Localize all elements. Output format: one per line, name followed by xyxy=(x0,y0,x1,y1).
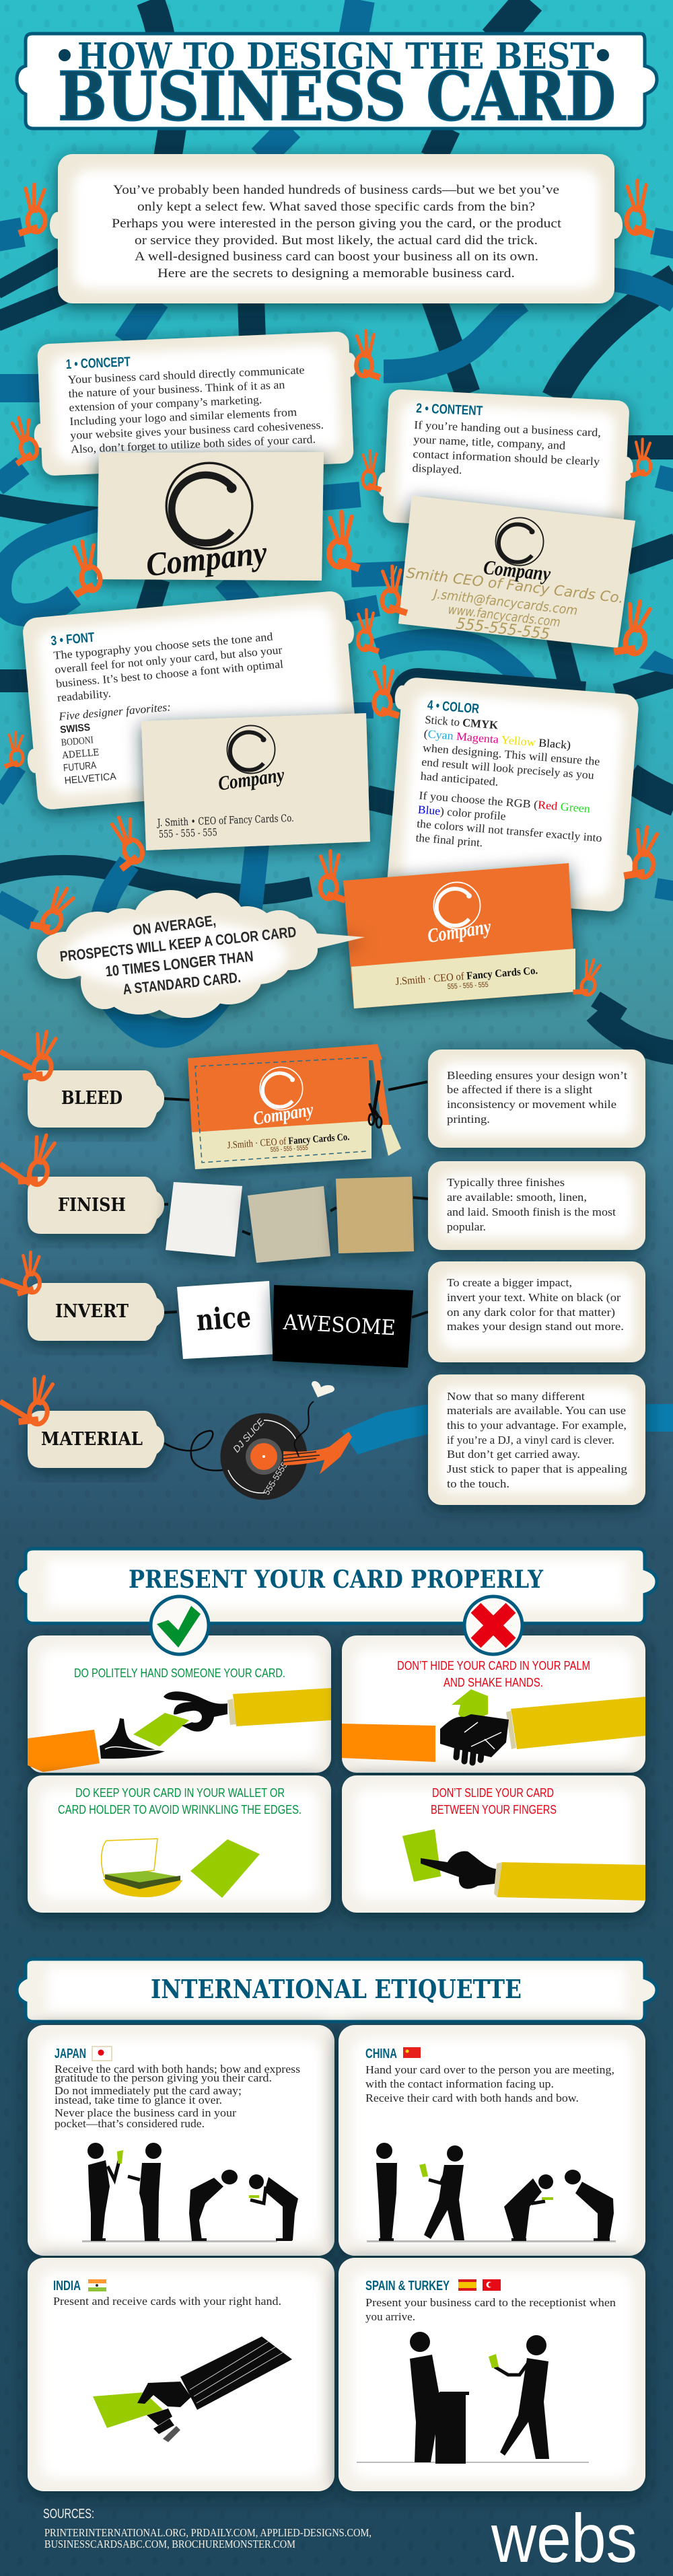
banner: international etiquette xyxy=(17,1959,657,2022)
callout: color card statistic: PROSPECTS WILL KEEP A COLOR CARD xyxy=(59,923,297,965)
text box: invert: invert your text. White on black (or xyxy=(447,1291,621,1304)
card: content details xyxy=(389,496,635,648)
panel: 4 color xyxy=(380,676,646,913)
text box: material: Now that so many different xyxy=(447,1390,585,1403)
title line one: HOW TO DESIGN THE BEST xyxy=(77,36,594,77)
panel: 1 concept xyxy=(30,331,361,476)
smooth swatch xyxy=(166,1182,242,1257)
icon: scissors xyxy=(369,1080,382,1128)
japan text: Do not immediately put the card away; xyxy=(55,2084,242,2097)
handwritten details: 555-555-555 xyxy=(455,615,551,643)
color text: If you choose the RGB ( Red Green xyxy=(419,789,591,815)
color text: the colors will not transfer exactly into xyxy=(417,817,602,844)
callout: color card statistic: 10 TIMES LONGER THAN xyxy=(104,947,254,980)
icon: orange hands holding panels xyxy=(5,181,658,997)
concept text: Also, don’t forget to utilize both sides of your card. xyxy=(71,433,316,455)
text box: bleed: be affected if there is a slight xyxy=(447,1083,592,1096)
china text: Hand your card over to the person you are meeting, xyxy=(365,2063,614,2076)
color text: the final print. xyxy=(415,832,483,849)
panel: do hand card xyxy=(28,1635,331,1773)
color text: end result will look precisely as you xyxy=(421,756,595,782)
sources: SOURCES: xyxy=(43,2507,94,2522)
text box: material: this to your advantage. For example, xyxy=(447,1419,627,1432)
concept text: Your business card should directly communicate xyxy=(67,363,305,386)
record xyxy=(221,1413,307,1500)
logo mark xyxy=(260,1067,303,1110)
title banner xyxy=(17,34,657,136)
title dot right xyxy=(597,49,609,61)
card phone: 555 - 555 - 5555 xyxy=(271,1144,308,1154)
panel: dont hide card xyxy=(342,1635,645,1773)
font text: BODONI xyxy=(61,735,94,748)
panel: do keep card: DO KEEP YOUR CARD IN YOUR WALLET OR xyxy=(75,1786,285,1800)
text box: bleed: inconsistency or movement while xyxy=(447,1098,616,1111)
logo mark xyxy=(166,463,252,549)
intro text: or service they provided. But most likely, the actual card did the trick. xyxy=(135,233,538,248)
panel: dont slide card: DON’T SLIDE YOUR CARD xyxy=(432,1786,554,1800)
font text: readability. xyxy=(57,687,112,704)
font text: business. It’s best to choose a font with optimal xyxy=(55,657,284,690)
callout: color card statistic: ON AVERAGE, xyxy=(132,912,217,939)
text box: bleed xyxy=(428,1050,645,1148)
tag: bleed: BLEED xyxy=(61,1088,122,1109)
banner: international etiquette: INTERNATIONAL ETIQUETTE xyxy=(151,1974,522,2004)
china text: Receive their card with both hands and bow. xyxy=(365,2092,579,2104)
card details: J.Smith · CEO of Fancy Cards Co. xyxy=(395,965,538,988)
panel: japan xyxy=(28,2025,334,2256)
illustration: handshake xyxy=(342,1689,645,1763)
font text: overall feel for not only your card, but also your xyxy=(55,643,283,676)
illustration: vinyl card xyxy=(164,1381,428,1500)
spain and turkey text xyxy=(365,2296,616,2323)
concept text: extension of your company’s marketing. xyxy=(69,393,262,414)
laid swatch xyxy=(336,1177,414,1253)
text box: material: But don’t get carried away. xyxy=(447,1448,580,1461)
handwritten details: J. Smith CEO of Fancy Cards Co. xyxy=(389,563,625,606)
company script: Company xyxy=(252,1099,315,1130)
china heading: CHINA xyxy=(365,2047,397,2061)
color text: had anticipated. xyxy=(420,770,499,788)
sources xyxy=(43,2507,371,2550)
icon: tag hands xyxy=(0,1029,57,1427)
banner: present your card properly: PRESENT YOUR CARD PROPERLY xyxy=(129,1566,544,1594)
concept text: the nature of your business. Think of it as an xyxy=(68,378,285,400)
connecting strings xyxy=(164,1082,428,1317)
tag: material xyxy=(28,1411,164,1468)
india text: Present and receive cards with your right hand. xyxy=(53,2295,281,2308)
content text: contact information should be clearly xyxy=(413,447,600,468)
intro text: only kept a select few. What saved those specific cards from the bin? xyxy=(137,200,535,214)
logo: webs: webs xyxy=(491,2500,637,2576)
panel: dont slide card: BETWEEN YOUR FINGERS xyxy=(431,1803,557,1816)
text box: finish: Typically three finishes xyxy=(447,1176,565,1189)
logo mark xyxy=(227,725,275,774)
tag: invert: INVERT xyxy=(55,1301,129,1322)
text box: finish: are available: smooth, linen, xyxy=(447,1191,587,1204)
text box: material: materials are available. You can use xyxy=(447,1404,626,1417)
content text xyxy=(412,401,602,482)
panel: dont hide card: DON’T HIDE YOUR CARD IN YOUR PALM xyxy=(397,1659,590,1672)
intro text: A well-designed business card can boost your business all on its own. xyxy=(135,250,538,264)
content text: your name, title, company, and xyxy=(413,433,566,452)
squiggle xyxy=(294,1401,314,1457)
text box: invert: on any dark color for that matter) xyxy=(447,1306,615,1319)
white card xyxy=(177,1281,273,1359)
handwritten details: J.smith@fancycards.com xyxy=(431,587,579,618)
blue sleeve xyxy=(341,1404,428,1455)
font text: SWISS xyxy=(59,722,91,736)
tag: invert xyxy=(28,1283,164,1341)
icon: flag of spain xyxy=(458,2279,476,2291)
handwritten details xyxy=(389,563,625,643)
india heading: INDIA xyxy=(53,2279,81,2293)
panel: china xyxy=(339,2025,645,2256)
content text: 2 • CONTENT xyxy=(416,401,483,418)
illustration: handing card xyxy=(28,1688,331,1772)
color text: Blue) color profile xyxy=(417,803,506,823)
sleeve end right of material box xyxy=(643,1404,673,1432)
illustration: chinese bowing figures xyxy=(367,2143,616,2242)
spain and turkey text: you arrive. xyxy=(365,2310,415,2323)
sources: BUSINESSCARDSABC.COM, BROCHUREMONSTER.COM xyxy=(44,2538,295,2550)
intro text: Here are the secrets to designing a memorable business card. xyxy=(157,266,515,281)
color text: 4 • COLOR xyxy=(427,698,480,716)
text box: material: Just stick to paper that is appealing xyxy=(447,1463,628,1475)
color text: (Cyan Magenta Yellow Black) xyxy=(423,727,571,751)
font text: ADELLE xyxy=(61,747,100,762)
panel: do hand card: DO POLITELY HAND SOMEONE YOUR CARD. xyxy=(74,1666,285,1680)
font text: 3 • FONT xyxy=(50,630,95,649)
japan text: pocket—that’s considered rude. xyxy=(55,2117,205,2130)
concept text: Including your logo and similar elements from xyxy=(69,406,297,428)
spain and turkey text: Present your business card to the receptionist when xyxy=(365,2296,616,2309)
illustration: japanese bowing figures xyxy=(82,2143,298,2242)
white card: nice xyxy=(195,1300,252,1338)
black card: AWESOME xyxy=(282,1311,396,1340)
trim line xyxy=(195,1058,369,1163)
record text: DJ SLICE xyxy=(231,1416,267,1455)
japan text: gratitude to the person giving you their card. xyxy=(55,2071,272,2084)
icon: cross badge xyxy=(464,1596,522,1654)
japan text: instead, take time to glance it over. xyxy=(55,2094,222,2106)
black card xyxy=(273,1285,413,1368)
panel: 3 font xyxy=(15,589,367,811)
callout: color card statistic xyxy=(37,890,365,1018)
font text: The typography you choose sets the tone and xyxy=(53,630,274,662)
intro text: You’ve probably been handed hundreds of business cards—but we bet you’ve xyxy=(113,183,559,197)
icon: heart xyxy=(312,1381,334,1397)
intro text xyxy=(112,183,562,281)
illustration: wallet xyxy=(102,1839,182,1897)
logo mark xyxy=(433,882,481,929)
concept text xyxy=(65,346,324,455)
text box: material: if you’re a DJ, a vinyl card is clever. xyxy=(447,1434,614,1446)
illustration: paper finishes xyxy=(166,1177,414,1263)
card: font sample xyxy=(141,713,370,850)
card: concept logo xyxy=(97,452,324,583)
tag: finish: FINISH xyxy=(58,1195,126,1216)
panel: do keep card xyxy=(28,1775,331,1913)
concept text: 1 • CONCEPT xyxy=(65,355,131,372)
banner: present your card properly xyxy=(17,1549,657,1623)
cut strip xyxy=(371,1044,401,1156)
company script: Company xyxy=(483,556,552,585)
panel: 2 content xyxy=(376,389,637,534)
text box: finish: and laid. Smooth finish is the most xyxy=(447,1206,616,1218)
text box: finish xyxy=(428,1161,645,1250)
company script: Company xyxy=(217,764,286,795)
sources: PRINTERINTERNATIONAL.ORG, PRDAILY.COM, APPLIED-DESIGNS.COM, xyxy=(44,2526,371,2539)
japan text xyxy=(55,2063,300,2130)
orange hand xyxy=(283,1432,352,1474)
concept text: your website gives your business card cohesiveness. xyxy=(70,418,324,442)
panel: intro xyxy=(50,154,623,303)
company script: Company xyxy=(144,533,269,583)
text box: finish: popular. xyxy=(447,1220,486,1233)
linen swatch xyxy=(248,1186,330,1263)
string xyxy=(164,1431,223,1471)
text box: material xyxy=(428,1374,645,1505)
font text: FUTURA xyxy=(63,760,97,774)
icon: flag of turkey xyxy=(483,2279,501,2291)
callout: color card statistic: A STANDARD CARD. xyxy=(122,969,242,998)
text box: bleed: Bleeding ensures your design won’t xyxy=(447,1069,627,1082)
card phone: 555 - 555 - 555 xyxy=(448,981,489,991)
card phone: 555 - 555 - 555 xyxy=(159,826,217,840)
icon: check badge xyxy=(151,1596,209,1654)
text box: material: to the touch. xyxy=(447,1477,509,1490)
illustration: invert cards xyxy=(177,1281,413,1368)
card details: J.Smith · CEO of Fancy Cards Co. xyxy=(227,1132,350,1151)
illustration: card between fingers xyxy=(402,1829,645,1901)
illustration: hand presenting card xyxy=(93,2336,292,2442)
panel: spain and turkey xyxy=(339,2258,645,2491)
illustration: receptionist and visitor xyxy=(357,2332,589,2464)
handwritten details: www.fancycards.com xyxy=(447,602,561,630)
text box: invert: makes your design stand out more. xyxy=(447,1320,624,1333)
card: orange color card xyxy=(343,863,575,1008)
content text: displayed. xyxy=(412,462,462,476)
icon: flag of japan xyxy=(92,2047,112,2061)
card details: J. Smith • CEO of Fancy Cards Co. xyxy=(156,812,294,829)
record phone: 555-5555 xyxy=(261,1460,289,1497)
font text: HELVETICA xyxy=(64,771,116,786)
text box: invert: To create a bigger impact, xyxy=(447,1276,572,1289)
spain and turkey heading: SPAIN & TURKEY xyxy=(365,2279,450,2293)
panel: do keep card: CARD HOLDER TO AVOID WRINKLING THE EDGES. xyxy=(58,1803,302,1816)
tag: bleed xyxy=(28,1070,164,1128)
text box: invert xyxy=(428,1261,645,1362)
illustration: bleed card xyxy=(188,1044,401,1169)
font text: Five designer favorites: xyxy=(58,700,172,723)
color text: when designing. This will ensure the xyxy=(422,741,600,768)
japan text: Never place the business card in your xyxy=(55,2106,236,2119)
panel: dont hide card: AND SHAKE HANDS. xyxy=(444,1676,543,1689)
tag: material: MATERIAL xyxy=(41,1429,143,1450)
logo mark xyxy=(495,517,544,566)
tag: finish xyxy=(28,1177,164,1234)
icon: flag of india xyxy=(88,2279,106,2291)
intro text: Perhaps you were interested in the person giving you the card, or the product xyxy=(112,217,562,231)
company script: Company xyxy=(426,916,493,947)
japan heading: JAPAN xyxy=(55,2047,86,2061)
china text: with the contact information facing up. xyxy=(365,2077,554,2090)
panel: india xyxy=(28,2258,334,2491)
font text xyxy=(50,614,293,786)
color text xyxy=(415,698,612,858)
content text: If you’re handing out a business card, xyxy=(414,418,601,439)
icon: flag of china xyxy=(403,2047,421,2058)
panel: dont slide card xyxy=(342,1775,645,1913)
china text xyxy=(365,2063,614,2104)
ribbons behind the panels xyxy=(0,0,673,1053)
illustration: green card xyxy=(190,1839,260,1898)
color text: Stick to CMYK xyxy=(425,713,499,732)
title dot left xyxy=(59,49,71,61)
text box: bleed: printing. xyxy=(447,1113,490,1126)
japan text: Receive the card with both hands; bow and express xyxy=(55,2063,300,2075)
